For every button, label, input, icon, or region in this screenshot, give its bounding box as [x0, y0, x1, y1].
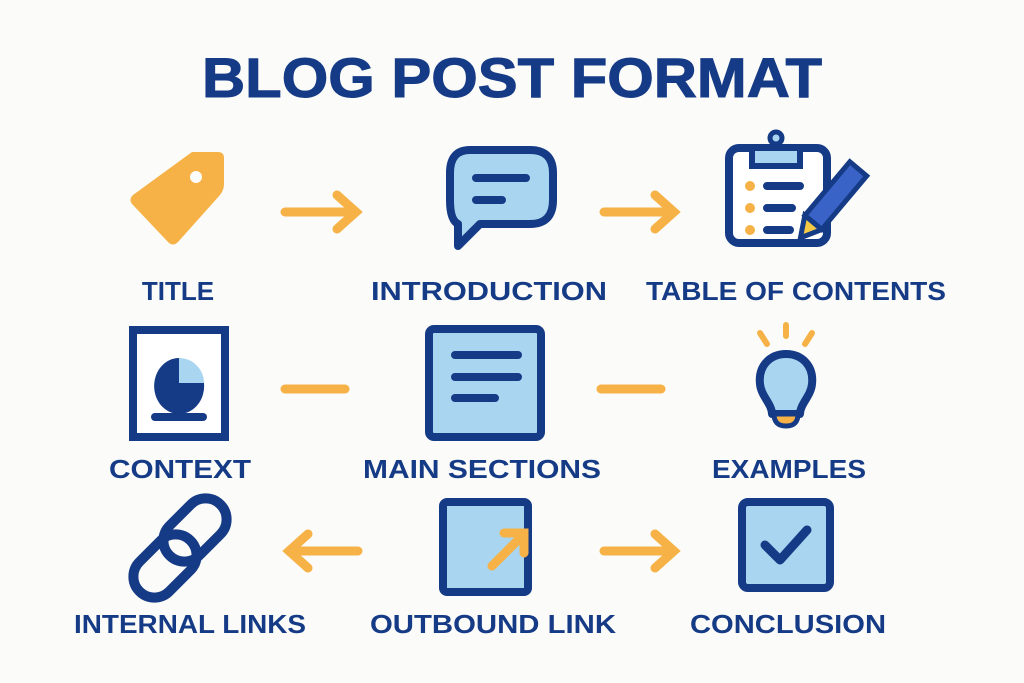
- label: table of contents: TABLE OF CONTENTS: [646, 276, 946, 306]
- icon: conclusion checkbox: [742, 502, 830, 588]
- arrow left: [289, 534, 358, 568]
- icon: speech bubble: [450, 150, 553, 246]
- arrow right: [604, 534, 674, 568]
- line 2: [601, 384, 661, 394]
- label: context: CONTEXT: [109, 454, 251, 484]
- icon: outbound link: [443, 502, 528, 592]
- label: conclusion: CONCLUSION: [690, 609, 886, 639]
- label: internal links: INTERNAL LINKS: [74, 609, 306, 639]
- label: introduction: INTRODUCTION: [371, 276, 607, 306]
- title: BLOG POST FORMAT: [202, 46, 822, 109]
- arrow 2: [604, 195, 674, 229]
- icon: main sections: [429, 329, 541, 437]
- icon: tag: [130, 152, 224, 244]
- label: outbound link: OUTBOUND LINK: [370, 609, 616, 639]
- icon: lightbulb: [760, 325, 812, 426]
- label: main sections: MAIN SECTIONS: [363, 454, 601, 484]
- line 1: [285, 384, 345, 394]
- icon: context document: [133, 330, 225, 437]
- icon: chain link: [125, 490, 235, 606]
- arrow 1: [285, 195, 356, 229]
- label: examples: EXAMPLES: [712, 454, 866, 484]
- label: title: TITLE: [142, 276, 214, 306]
- icon: clipboard: [729, 132, 867, 245]
